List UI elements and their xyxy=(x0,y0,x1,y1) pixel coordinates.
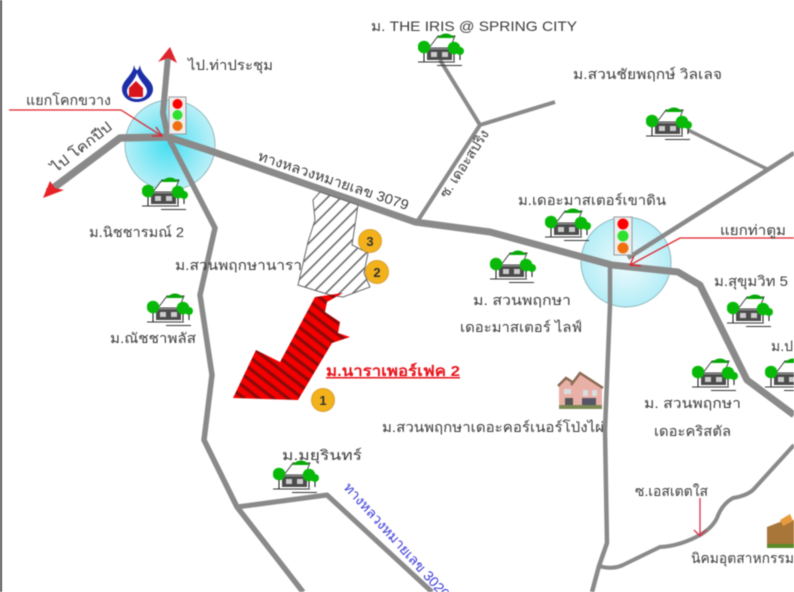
label: Nitcharamon 2: ม.นิชชารมณ์ 2 xyxy=(89,224,184,240)
label: Suan Phruksa The Corner: ม.สวนพฤกษาเดอะคอร์เนอร์โป่งไผ่ xyxy=(382,419,604,435)
label: Sukhumvit 5: ม.สุขุมวิท 5 xyxy=(714,273,788,290)
badge 2 xyxy=(366,260,388,284)
house icons xyxy=(142,34,794,492)
label: cut-off village: ม.ป xyxy=(771,338,793,354)
left page border xyxy=(0,0,2,592)
badge 3 xyxy=(358,230,382,252)
arrow: southwest to Khok Pip xyxy=(43,181,64,198)
label: Tha Tum junction: แยกท่าตูม xyxy=(720,222,786,239)
PTT station icon xyxy=(122,65,153,102)
callout arrow: soi Estate xyxy=(694,498,706,536)
arrow: north to Tha Prachum xyxy=(158,47,177,63)
label: soi The Spring: ซ. เดอะสปริง xyxy=(436,127,492,201)
traffic light: right xyxy=(614,217,632,255)
label: Suan Phruksa The Crystal line 1: ม. สวนพฤกษา xyxy=(644,395,741,411)
icon: pink house xyxy=(558,373,603,409)
label: The Iris: ม. THE IRIS @ SPRING CITY xyxy=(371,18,578,34)
roundabout: left junction xyxy=(125,100,215,190)
plot: red project land xyxy=(233,293,350,400)
label: Suan Phruksa Nara: ม.สวนพฤกษานารา xyxy=(175,257,302,273)
label: Khok Khwang: แยกโคกขวาง xyxy=(26,92,111,108)
label: project name: ม.นาราเพอร์เฟค 2 xyxy=(326,362,460,380)
label: to Khok Pip: ไป โคกปีป xyxy=(47,118,115,176)
label: Suan Phruksa The Master Life line 1: ม. สวนพฤกษา xyxy=(473,292,571,308)
badge 1 xyxy=(312,388,334,412)
label: Suan Phruksa The Crystal line 2: เดอะคริสตัล xyxy=(654,423,731,439)
label: Suan Phruksa The Master Life line 2: เดอะมาสเตอร์ ไลฟ์ xyxy=(460,319,582,335)
label: soi Estate: ซ.เอสเตตใส xyxy=(635,483,708,499)
plot: hatched grey land xyxy=(298,192,370,297)
traffic light: left xyxy=(169,97,186,134)
label: The Master Khao Din: ม.เดอะมาสเตอร์เขาดิน xyxy=(518,192,666,208)
badge 2: 2 xyxy=(373,265,381,280)
badge 3: 3 xyxy=(366,234,374,249)
label: highway 3079: ทางหลวงหมายเลข 3079 xyxy=(256,148,411,213)
roundabout: right junction xyxy=(581,217,671,307)
label: industrial estate: นิคมอุตสาหกรรม xyxy=(691,550,794,567)
label: Mayurin: ม.มยุรินทร์ xyxy=(282,447,363,464)
icon: industrial estate building xyxy=(767,514,794,548)
callout arrow: Tha Tum junction xyxy=(630,238,794,266)
label: to Tha Prachum: ไป.ท่าประชุม xyxy=(187,57,273,74)
label: Nat Charapat: ม.ณัชชาพลัส xyxy=(110,330,196,346)
label: Suan Chaiyaphruek Village: ม.สวนชัยพฤกษ์ วิลเลจ xyxy=(573,66,722,82)
callout arrow: Khok Khwang junction xyxy=(9,110,162,136)
badge 1: 1 xyxy=(319,393,327,408)
